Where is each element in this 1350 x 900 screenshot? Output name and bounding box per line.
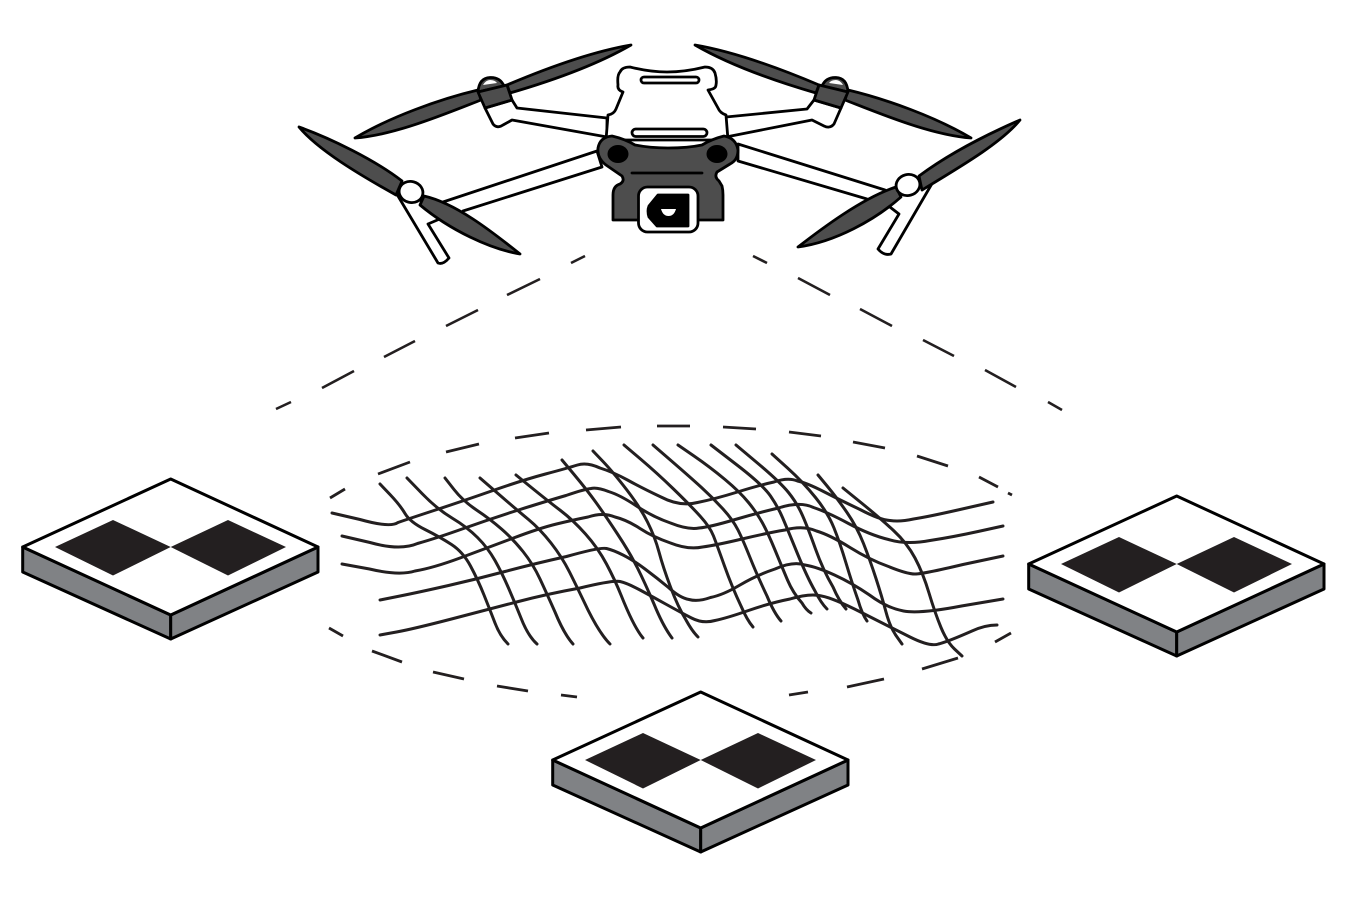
dashed survey area ellipse xyxy=(329,426,1012,697)
ground control target: left xyxy=(23,479,318,639)
gray sensor housing xyxy=(598,136,738,220)
ground control target: front xyxy=(553,692,848,852)
housing seam xyxy=(632,172,702,174)
arm: front right xyxy=(738,144,885,202)
ground control target: right xyxy=(1029,496,1324,656)
motor dome: rear right xyxy=(822,77,848,92)
lower vent slot xyxy=(632,129,707,136)
top vent slot xyxy=(641,77,699,83)
motor dome: rear left xyxy=(478,77,504,92)
drone xyxy=(299,45,1020,263)
folding leg: left xyxy=(392,186,449,263)
propeller: rear left xyxy=(355,45,631,138)
right obstacle sensor xyxy=(706,145,728,163)
propeller: front left xyxy=(299,127,520,254)
arm: front left xyxy=(443,151,602,213)
arm: rear left xyxy=(485,100,607,137)
dome highlight: rear left xyxy=(483,80,497,85)
propeller: rear right xyxy=(695,45,971,138)
drone body shell xyxy=(606,67,728,140)
dome highlight: rear right xyxy=(829,80,843,85)
lens highlight xyxy=(661,209,676,216)
terrain mesh xyxy=(332,445,1003,656)
arm: rear right xyxy=(726,100,841,137)
camera lens xyxy=(648,195,688,226)
propeller: front right xyxy=(798,120,1020,247)
camera field of view dashed lines xyxy=(276,256,1062,410)
folding leg: right xyxy=(878,175,937,254)
left obstacle sensor xyxy=(608,145,628,163)
camera gimbal xyxy=(638,187,698,232)
